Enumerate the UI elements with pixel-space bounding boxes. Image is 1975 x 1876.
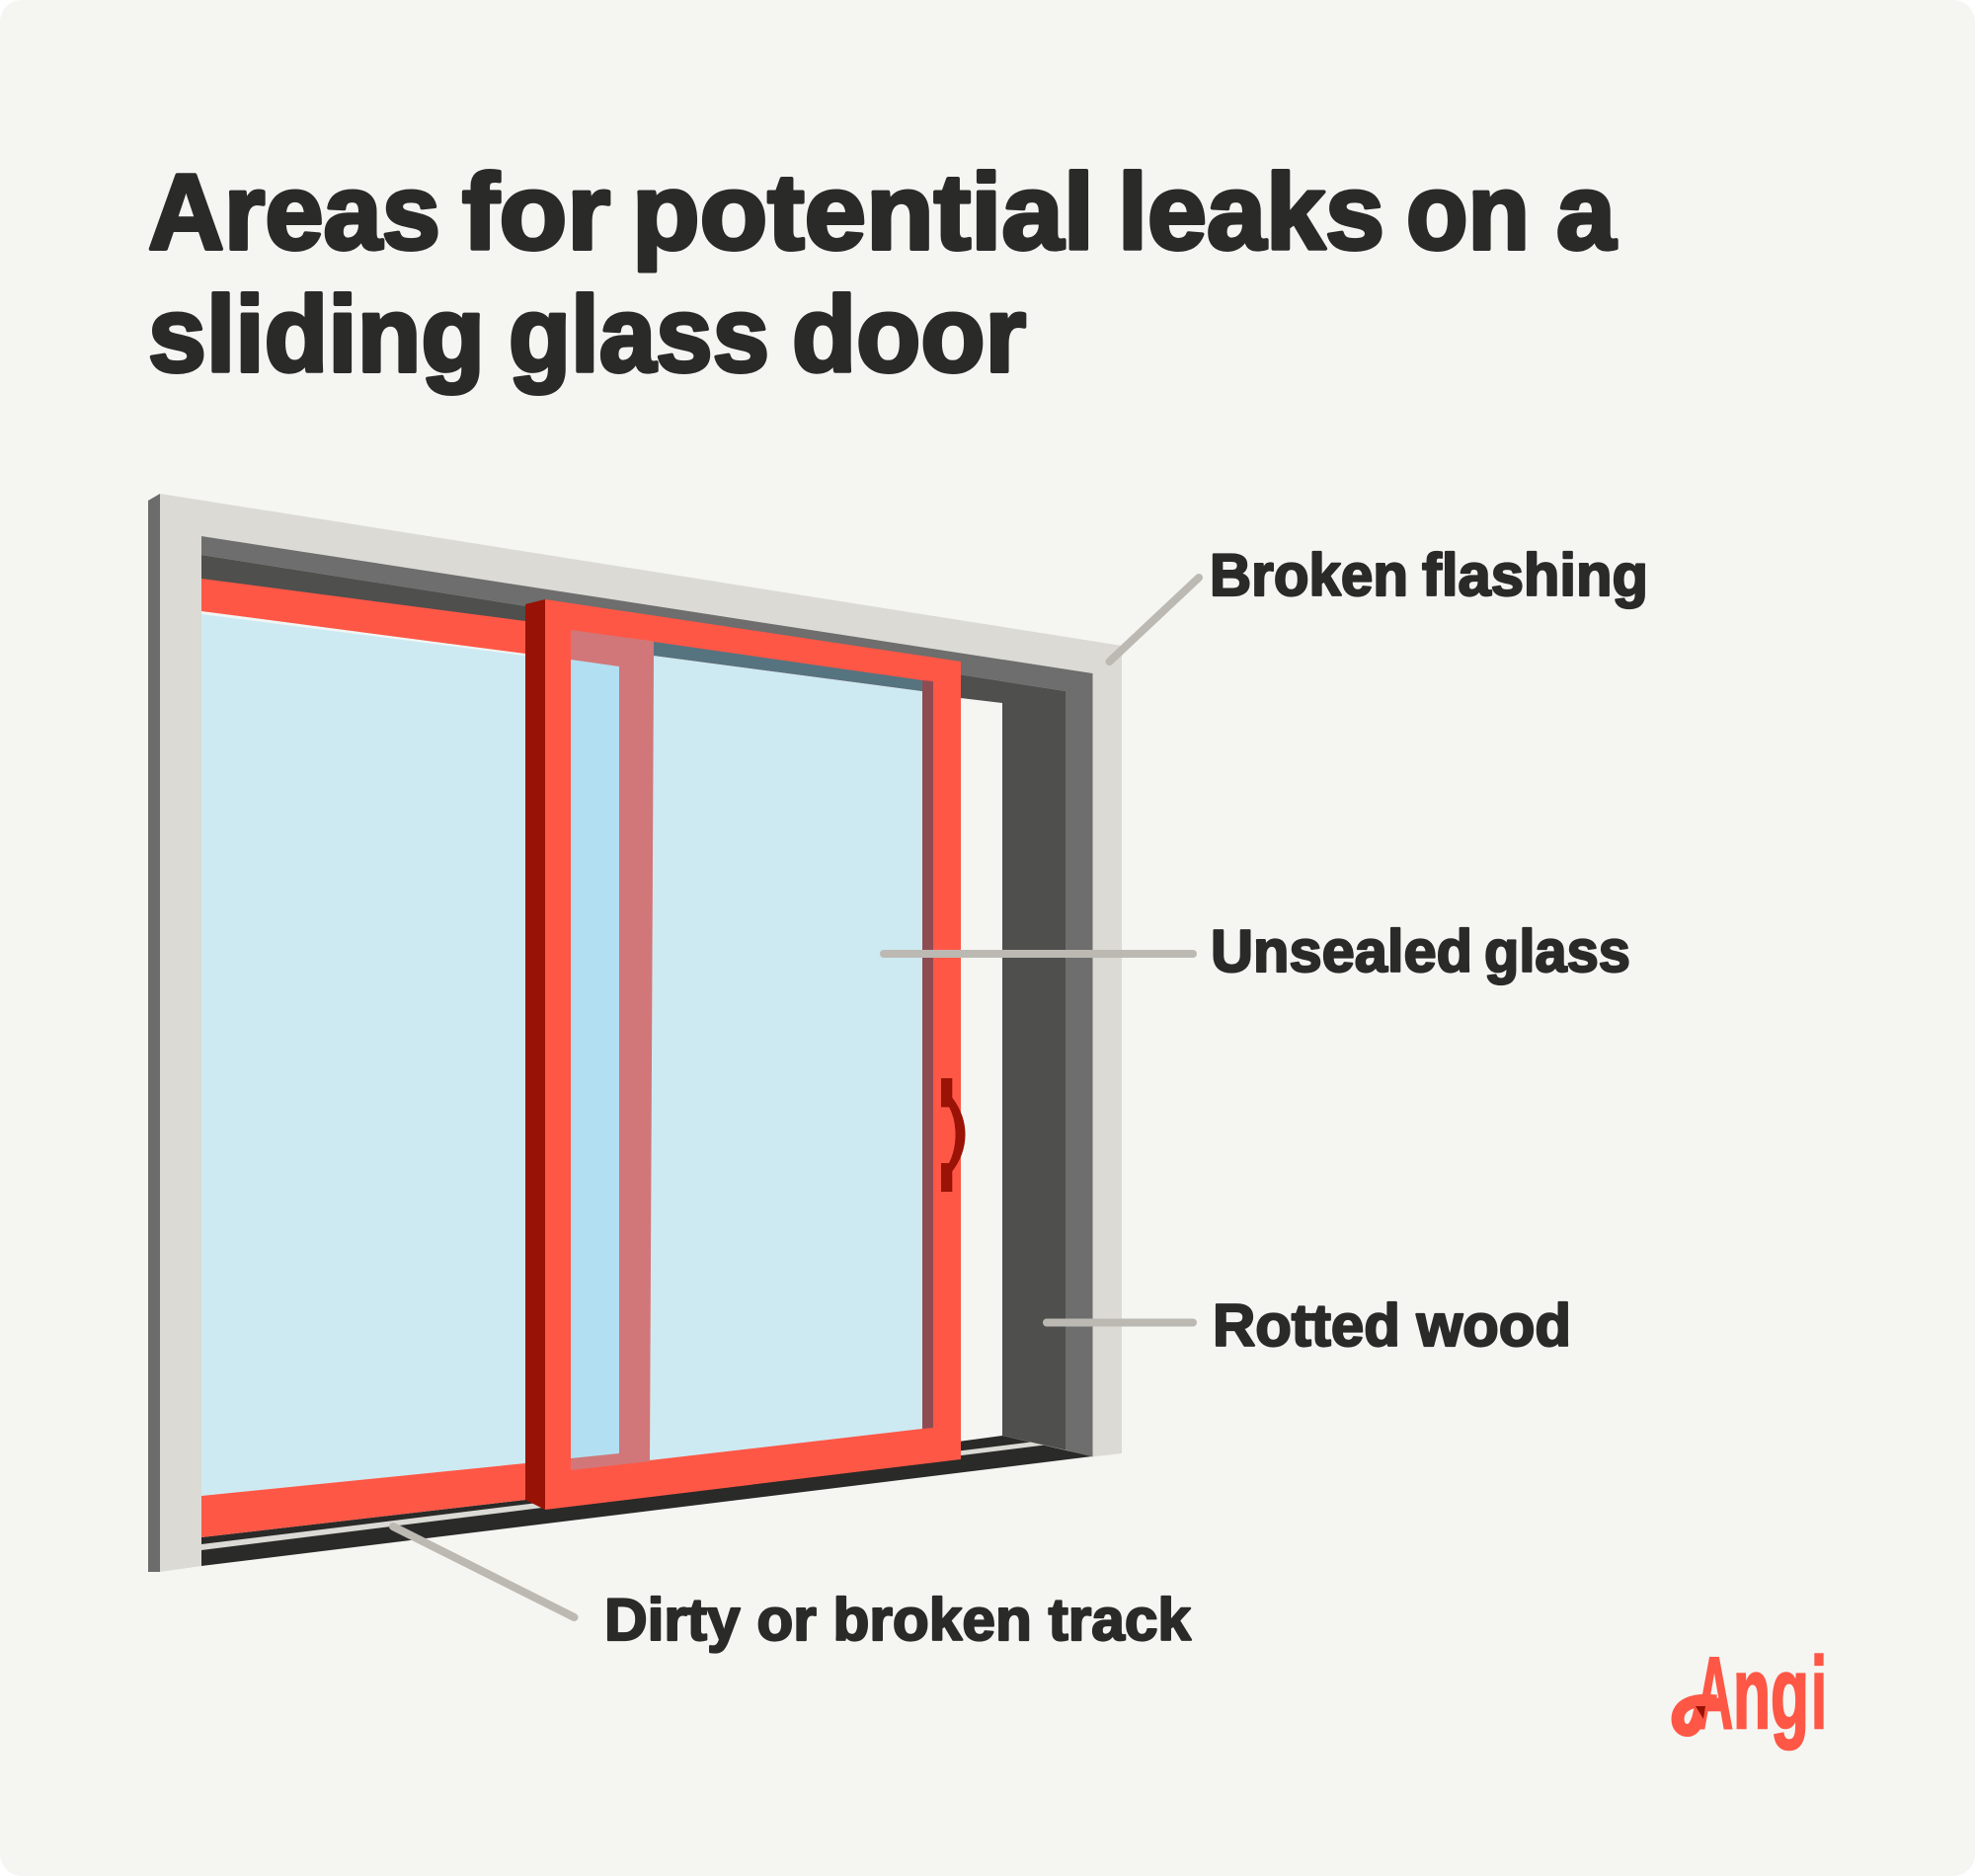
fixed panel bottom rail xyxy=(201,1463,525,1537)
label: dirty or broken track: Dirty or broken track xyxy=(604,1587,1192,1653)
outer frame face xyxy=(160,494,1122,1572)
logo wordmark: A xyxy=(1696,1636,1733,1750)
logo wordmark: g xyxy=(1771,1636,1809,1750)
label: unsealed glass: glass xyxy=(1484,918,1630,984)
fixed panel glass xyxy=(201,613,525,1496)
title line 1: on xyxy=(1406,152,1530,273)
logo swoosh xyxy=(1678,1700,1716,1730)
title line 1: potential xyxy=(632,152,1094,273)
label: rotted wood: Rotted wood xyxy=(1213,1292,1571,1359)
outer frame left edge xyxy=(148,494,160,1572)
title line 2: glass xyxy=(509,274,769,395)
title line 2: sliding xyxy=(148,274,485,395)
bottom track xyxy=(201,1436,1092,1566)
fixed panel top highlight xyxy=(201,611,525,656)
sliding door side xyxy=(525,599,545,1510)
fixed panel top rail xyxy=(201,579,525,654)
glass seen through overlap xyxy=(571,660,619,1458)
logo wordmark: i xyxy=(1811,1636,1827,1750)
icon: door handle xyxy=(941,1078,966,1192)
label: broken flashing: flashing xyxy=(1422,542,1648,608)
track rail xyxy=(201,1442,1049,1550)
illustration: sliding glass door xyxy=(148,494,1122,1572)
logo swoosh fold xyxy=(1696,1706,1705,1719)
door glass xyxy=(650,656,922,1460)
title line 1: Areas xyxy=(148,152,440,273)
title line 1: for xyxy=(462,152,610,273)
label: unsealed glass: Unsealed xyxy=(1211,918,1472,984)
label: broken flashing: Broken xyxy=(1210,542,1408,608)
frame inner dark wall xyxy=(201,555,1066,1449)
logo: Angi xyxy=(1678,1636,1827,1750)
title line 2: door xyxy=(792,274,1026,395)
leader: unsealed glass xyxy=(884,950,1193,958)
leader: dirty or broken track xyxy=(393,1526,575,1617)
frame inner top and right side xyxy=(201,536,1092,1457)
leader: rotted wood xyxy=(1047,1319,1193,1327)
door overlap tint xyxy=(571,630,654,1470)
leader lines xyxy=(393,578,1199,1617)
sliding door frame xyxy=(545,599,961,1510)
door top shadow xyxy=(654,642,922,691)
logo wordmark: n xyxy=(1733,1636,1771,1750)
title xyxy=(148,152,1617,395)
leader: broken flashing xyxy=(1110,578,1199,662)
title line 1: a xyxy=(1556,152,1617,273)
title line 1: leaks xyxy=(1118,152,1384,273)
door right shadow xyxy=(922,680,933,1429)
